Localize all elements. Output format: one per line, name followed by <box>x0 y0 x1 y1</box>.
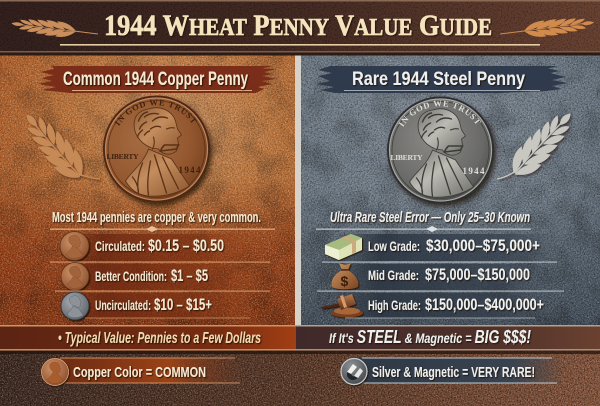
icon: magnet badge <box>341 358 367 384</box>
copper row: uncirculated <box>60 292 255 320</box>
icon: cash stack <box>325 234 362 260</box>
panel: copper penny <box>0 55 296 327</box>
heading banner: steel <box>316 66 568 93</box>
steel row: high grade <box>321 293 555 318</box>
icon: header wheat left <box>11 16 99 41</box>
copper row: circulated: Circulated: <box>95 238 145 254</box>
summary strip: steel: If It's STEEL & Magnetic = BIG $$$! <box>329 327 531 347</box>
steel row: low grade: Low Grade: <box>368 238 420 254</box>
callout: silver and magnetic <box>341 358 565 384</box>
summary strip: copper: • Typical Value: Pennies to a Few Dollars <box>58 330 261 347</box>
steel coin: IN GOD WE TRUST <box>398 100 482 127</box>
copper row: better condition <box>55 262 270 292</box>
copper intro divider <box>50 226 275 232</box>
title: 1944 WHEAT PENNY VALUE GUIDE <box>104 9 492 42</box>
callout: copper color <box>42 358 245 386</box>
heading banner: steel: Rare 1944 Steel Penny <box>352 69 525 90</box>
bottom band <box>0 351 600 406</box>
summary strip: steel <box>296 325 600 350</box>
summary strip: copper <box>0 325 296 350</box>
icon: header wheat right <box>499 15 594 42</box>
copper coin: IN GOD WE TRUST <box>114 100 197 126</box>
title band <box>0 0 600 56</box>
copper row: uncirculated: Uncirculated: <box>95 298 151 313</box>
icon: embossed wheat copper <box>17 107 100 185</box>
steel row: mid grade: $75,000–$150,000 <box>425 265 530 284</box>
steel row: high grade: High Grade: <box>368 297 421 313</box>
copper row: circulated <box>50 232 270 263</box>
steel row: high grade: $150,000–$400,000+ <box>425 295 544 314</box>
steel row: mid grade <box>317 263 564 292</box>
copper row: better condition: Better Condition: <box>95 269 167 284</box>
copper coin: 1944 <box>178 165 201 175</box>
icon: money bag: $ <box>340 273 348 289</box>
steel row: low grade <box>322 234 560 263</box>
heading banner: copper <box>38 66 276 93</box>
icon: money bag <box>332 263 359 289</box>
steel intro divider <box>316 226 531 232</box>
icon: gavel <box>321 294 363 318</box>
copper row: better condition: $1 – $5 <box>171 266 208 285</box>
steel coin: LIBERTY <box>390 153 423 162</box>
copper row: uncirculated: $10 – $15+ <box>154 295 212 314</box>
callout: copper color: Copper Color = COMMON <box>73 364 206 381</box>
copper coin <box>102 95 216 209</box>
centre divider <box>295 55 301 327</box>
icon: embossed wheat steel <box>497 105 579 182</box>
heading banner: copper: Common 1944 Copper Penny <box>63 69 248 90</box>
copper intro text: Most 1944 pennies are copper & very common. <box>52 210 261 226</box>
steel coin <box>386 96 499 210</box>
callout: silver and magnetic: Silver & Magnetic = VERY RARE! <box>372 364 535 381</box>
copper row: circulated: $0.15 – $0.50 <box>148 236 224 255</box>
steel row: mid grade: Mid Grade: <box>368 267 419 283</box>
panel: steel penny <box>301 55 600 327</box>
steel coin: 1944 <box>462 166 485 176</box>
steel row: low grade: $30,000–$75,000+ <box>426 236 540 255</box>
copper coin: LIBERTY <box>106 152 139 161</box>
